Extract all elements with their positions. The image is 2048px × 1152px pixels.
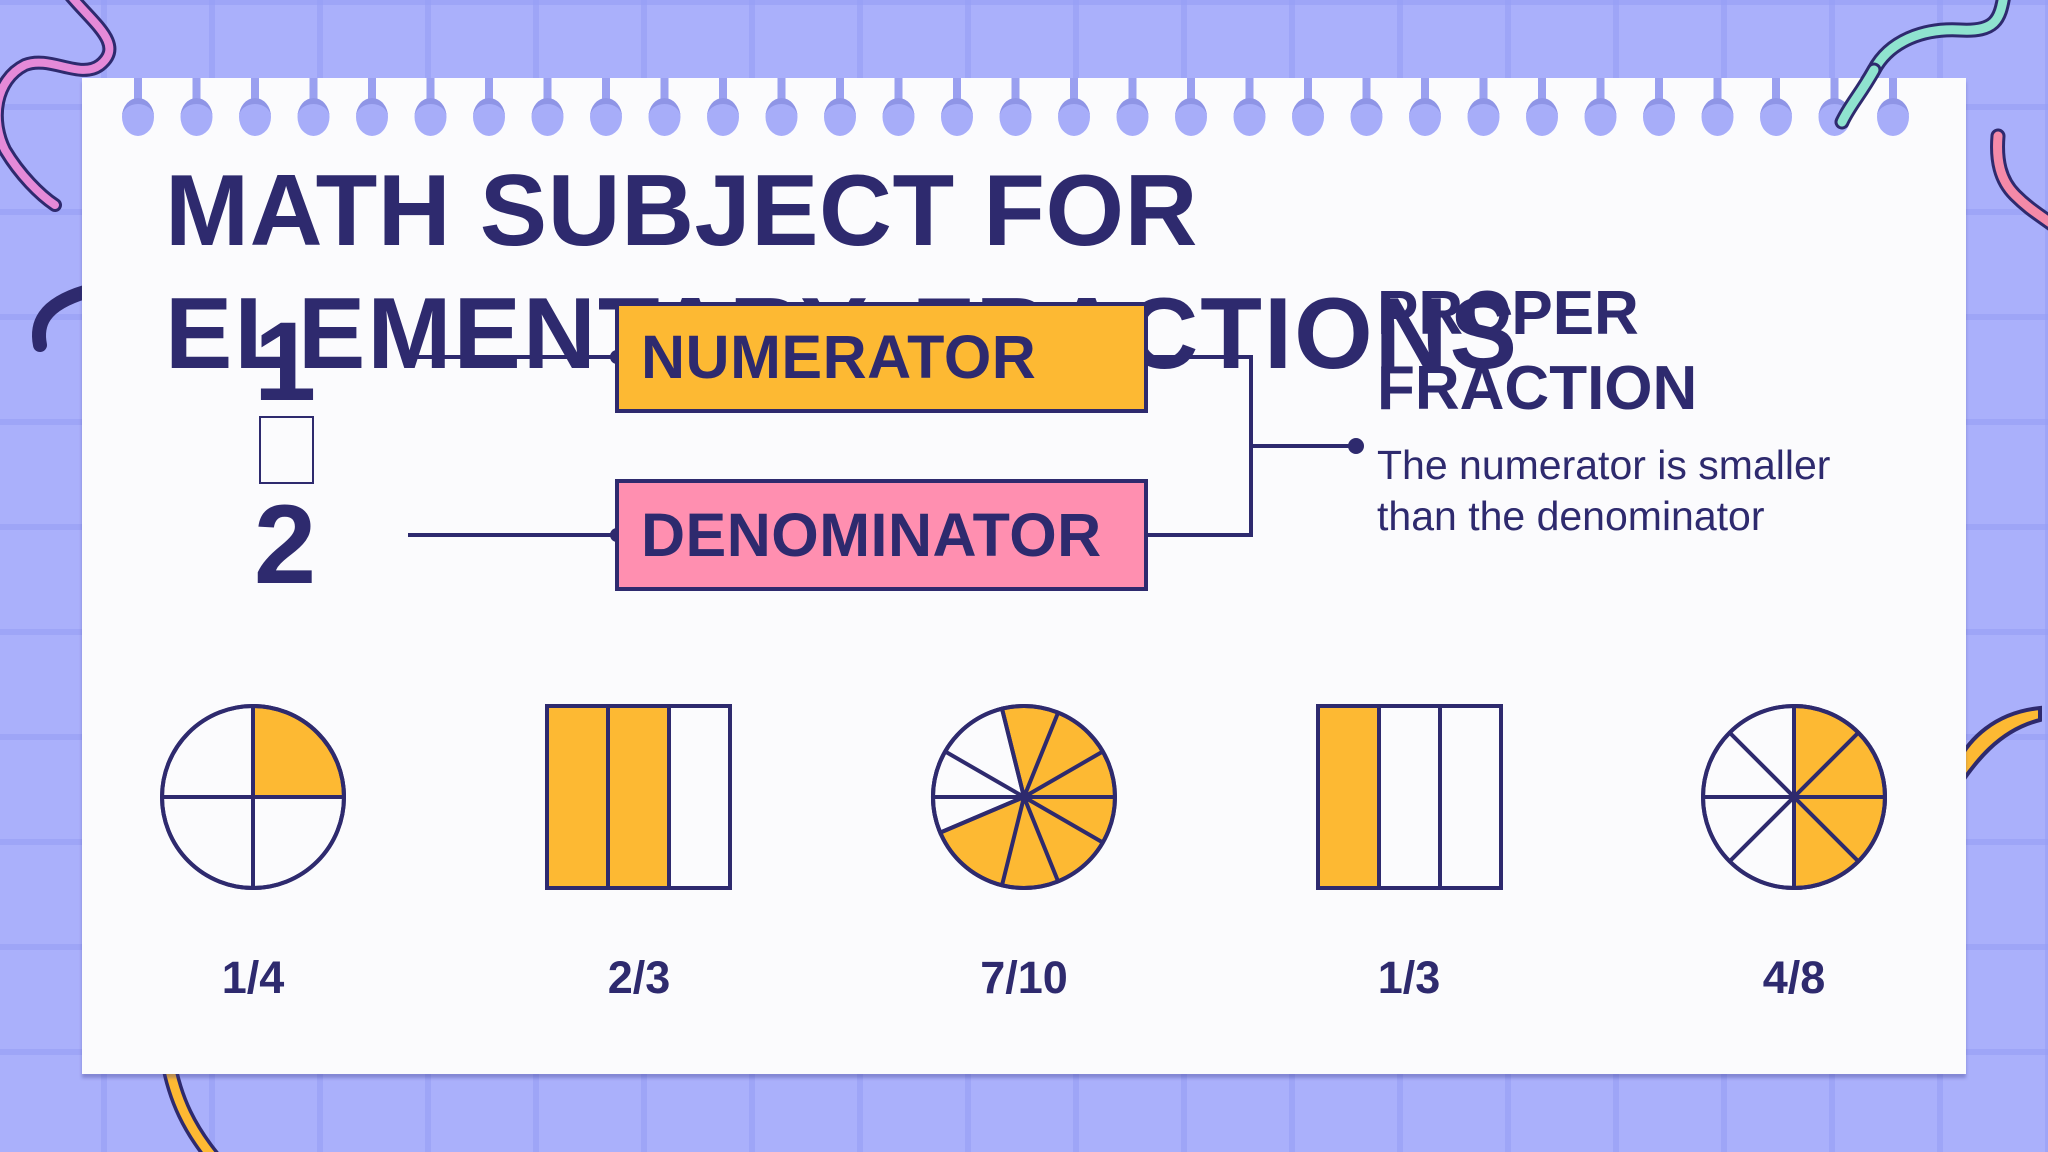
shape 1/3 — [1318, 706, 1501, 888]
numerator digit: 1 — [254, 299, 316, 424]
connector lines — [408, 350, 1364, 542]
title: MATH SUBJECT FOR — [165, 155, 1198, 267]
labels: 7/10 — [980, 952, 1068, 1003]
heading: PROPER — [1377, 279, 1639, 348]
shape 7/10 — [933, 706, 1115, 888]
shape 4/8 — [1703, 706, 1885, 888]
numerator box — [615, 302, 1148, 413]
description: The numerator is smaller — [1377, 442, 1830, 488]
fraction shapes row — [160, 704, 1887, 1003]
labels: 1/4 — [222, 952, 284, 1003]
numerator box: NUMERATOR — [641, 323, 1036, 391]
squiggle: orange bottom-left — [168, 1060, 215, 1152]
shape 2/3 — [547, 706, 730, 888]
heading — [1377, 279, 1697, 423]
squiggle: teal top-right — [1842, 0, 2004, 122]
spiral holes — [122, 62, 1909, 136]
proper fraction text block — [1377, 279, 1830, 539]
heading: FRACTION — [1377, 354, 1697, 423]
squiggle: navy hook left — [39, 292, 85, 345]
denominator box — [615, 479, 1148, 591]
labels: 1/3 — [1378, 952, 1440, 1003]
title — [165, 155, 1519, 390]
shape 1/4 — [162, 706, 344, 888]
description — [1377, 442, 1830, 539]
denominator box: DENOMINATOR — [641, 500, 1102, 568]
labels: 2/3 — [608, 952, 670, 1003]
fraction bar glyph box — [259, 416, 314, 484]
squiggle: pink right — [1998, 136, 2048, 230]
title: ELEMENTARY FRACTIONS — [165, 278, 1519, 390]
paper sheet — [82, 78, 1966, 1074]
description: than the denominator — [1377, 493, 1764, 539]
squiggle: orange right — [1950, 708, 2040, 800]
squiggle: pink top-left — [0, 0, 109, 205]
labels: 4/8 — [1763, 952, 1825, 1003]
labels — [222, 952, 1825, 1003]
fraction 1/2 — [254, 299, 316, 607]
denominator digit: 2 — [254, 482, 316, 607]
